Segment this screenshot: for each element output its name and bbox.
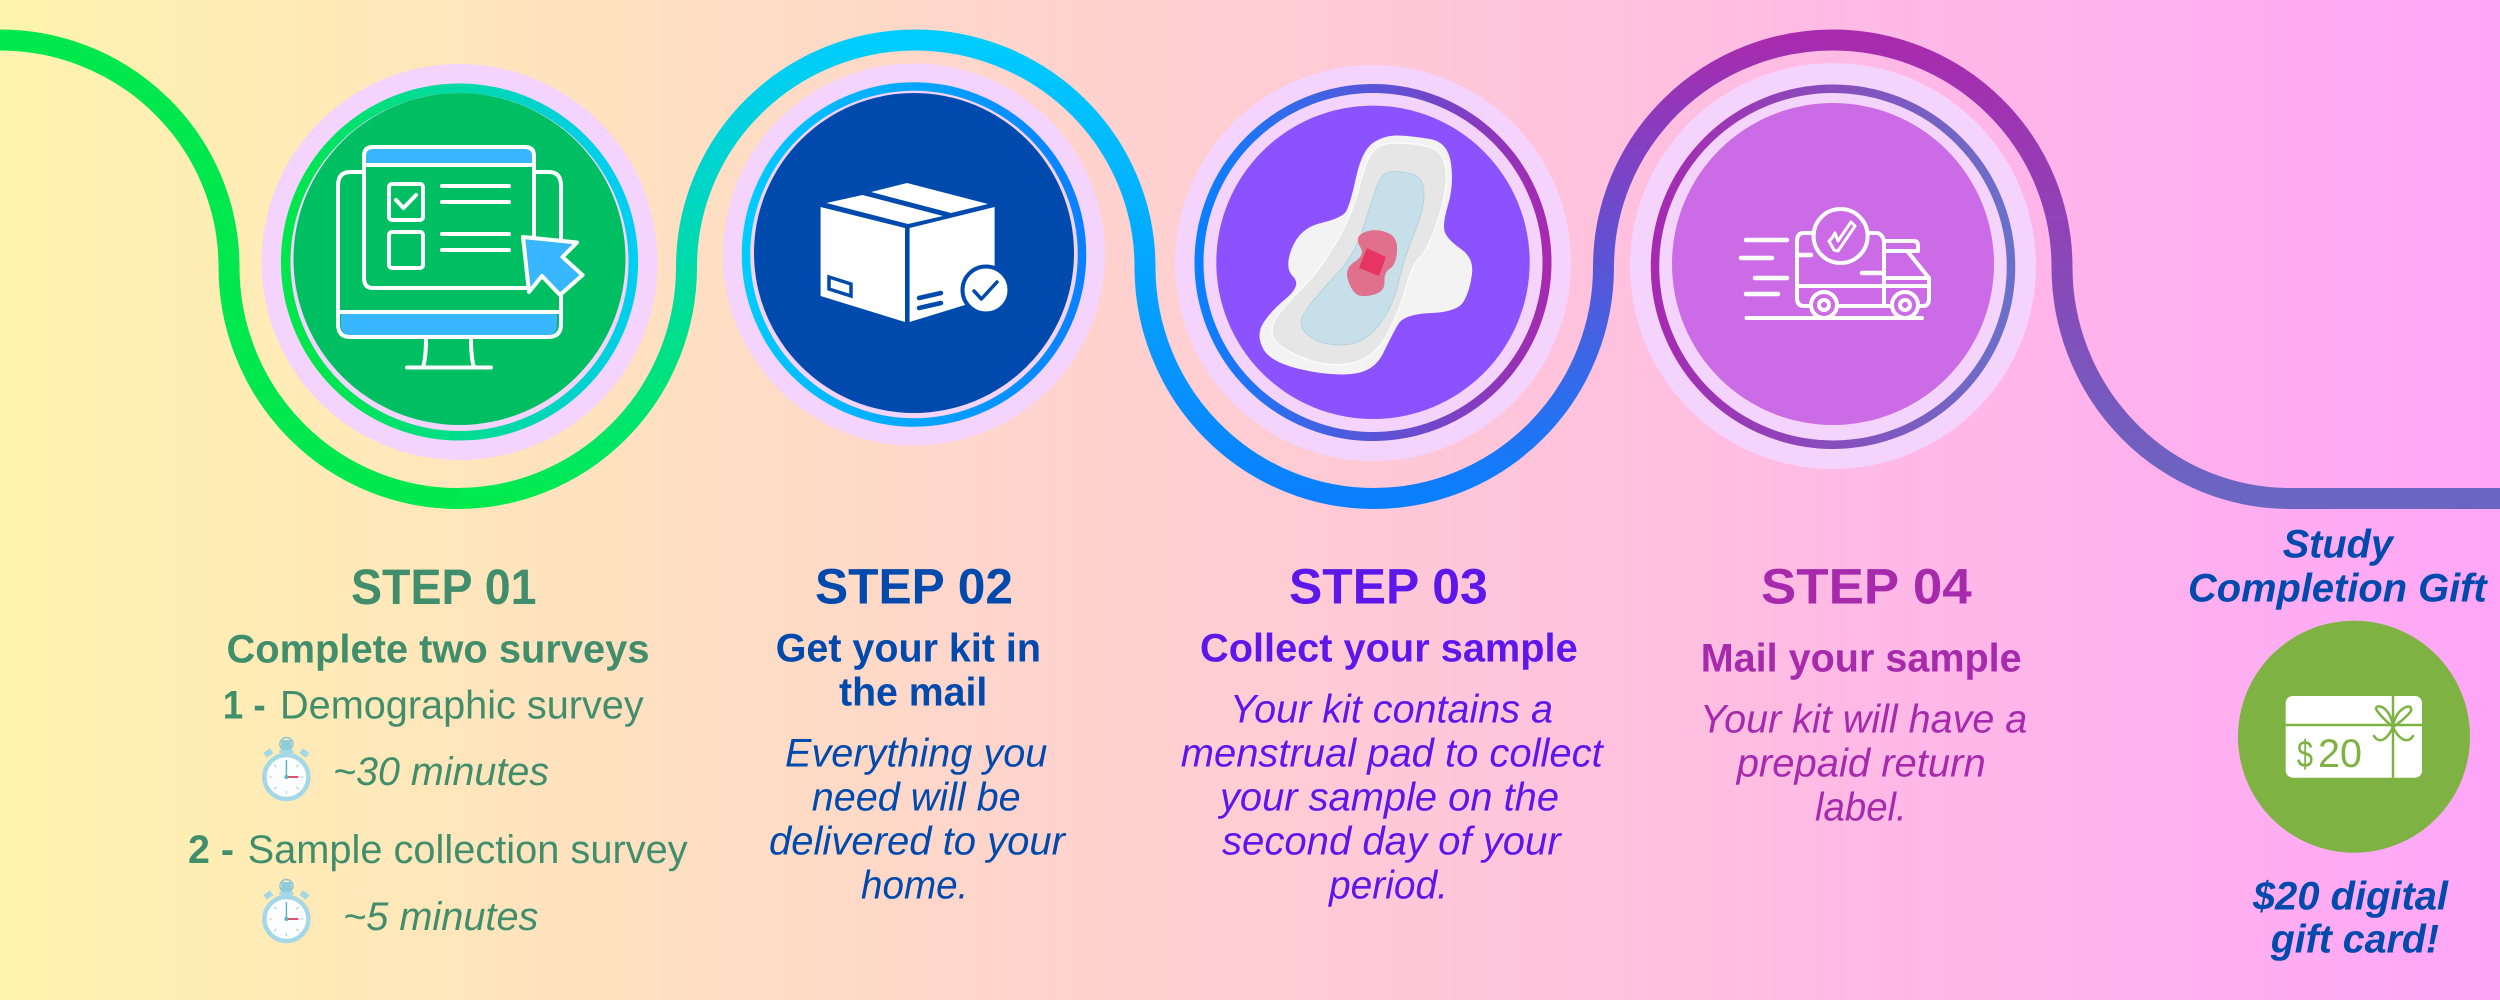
- panel: step 4 text: [1700, 558, 2027, 830]
- survey 1 line: Demographic survey: [280, 683, 644, 727]
- caption: digital gift card: $20 digital: [2252, 874, 2449, 918]
- panel: step 2 icon circle: [723, 64, 1105, 446]
- icon: delivery truck with check: [1741, 209, 1929, 318]
- caption: digital gift card: gift card!: [2270, 918, 2439, 962]
- heading: study completion gift: Completion Gift: [2188, 567, 2488, 611]
- panel: step 3 icon circle: [1175, 65, 1571, 461]
- description: kit contents: second day of your: [1222, 819, 1562, 863]
- caption: digital gift card: [2252, 874, 2449, 962]
- panel: step 3 text: [1181, 558, 1605, 907]
- description: prepaid label: prepaid return: [1736, 742, 1986, 786]
- survey 2 line: 2 -: [188, 828, 234, 872]
- subheading: complete two surveys: Complete two surveys: [226, 628, 650, 672]
- panel: step 1 text: [188, 559, 688, 941]
- description: delivery: delivered to your: [769, 819, 1067, 863]
- description: delivery: [769, 732, 1067, 907]
- description: prepaid label: [1700, 698, 2027, 830]
- icon: computer with survey and cursor: [338, 147, 582, 368]
- description: delivery: need will be: [812, 776, 1021, 820]
- panel: step 1 icon circle: [262, 64, 658, 460]
- description: kit contents: Your kit contains a: [1230, 688, 1553, 732]
- heading: step 04: STEP 04: [1761, 558, 1972, 614]
- text: 5 minutes: ~5 minutes: [343, 895, 538, 939]
- description: kit contents: menstrual pad to collect: [1181, 732, 1605, 776]
- heading: step 03: STEP 03: [1289, 558, 1488, 614]
- icon: gift card in green circle: [2238, 621, 2470, 853]
- subheading: get your kit: Get your kit in: [776, 627, 1041, 671]
- icon: stopwatch 1: [263, 738, 309, 799]
- description: kit contents: your sample on the: [1217, 776, 1559, 820]
- text: 30 minutes: ~30 minutes: [333, 750, 549, 794]
- survey 1 line: 1 -: [223, 683, 266, 727]
- description: prepaid label: Your kit will have a: [1700, 698, 2027, 742]
- description: delivery: home.: [861, 863, 968, 907]
- icon: parcel box with check: [821, 183, 1010, 322]
- heading: study completion gift: Study: [2283, 522, 2395, 566]
- heading: step 02: STEP 02: [815, 558, 1013, 614]
- icon: gift card in green circle: $: [2297, 734, 2313, 776]
- description: kit contents: [1181, 688, 1605, 907]
- panel: step 2 text: [769, 558, 1067, 907]
- survey 2 line: Sample collection survey: [248, 828, 688, 872]
- description: kit contents: period.: [1328, 863, 1448, 907]
- icon: stopwatch 2: [263, 880, 309, 941]
- icon: menstrual pad: [1260, 135, 1472, 374]
- winding path connecting the steps: [0, 40, 2500, 499]
- subheading: collect your sample: Collect your sample: [1200, 627, 1578, 671]
- description: prepaid label: label.: [1815, 786, 1907, 830]
- heading: step 01: STEP 01: [351, 559, 536, 615]
- subheading: get your kit: the mail: [839, 671, 987, 715]
- subheading: get your kit: [776, 627, 1041, 715]
- panel: step 4 icon circle: [1630, 63, 2036, 469]
- subheading: mail your sample: Mail your sample: [1701, 637, 2022, 681]
- description: delivery: Everything you: [785, 732, 1047, 776]
- heading: study completion gift: [2188, 522, 2488, 611]
- icon: gift card in green circle: 20: [2318, 732, 2362, 776]
- panel: study completion gift: [2188, 522, 2488, 962]
